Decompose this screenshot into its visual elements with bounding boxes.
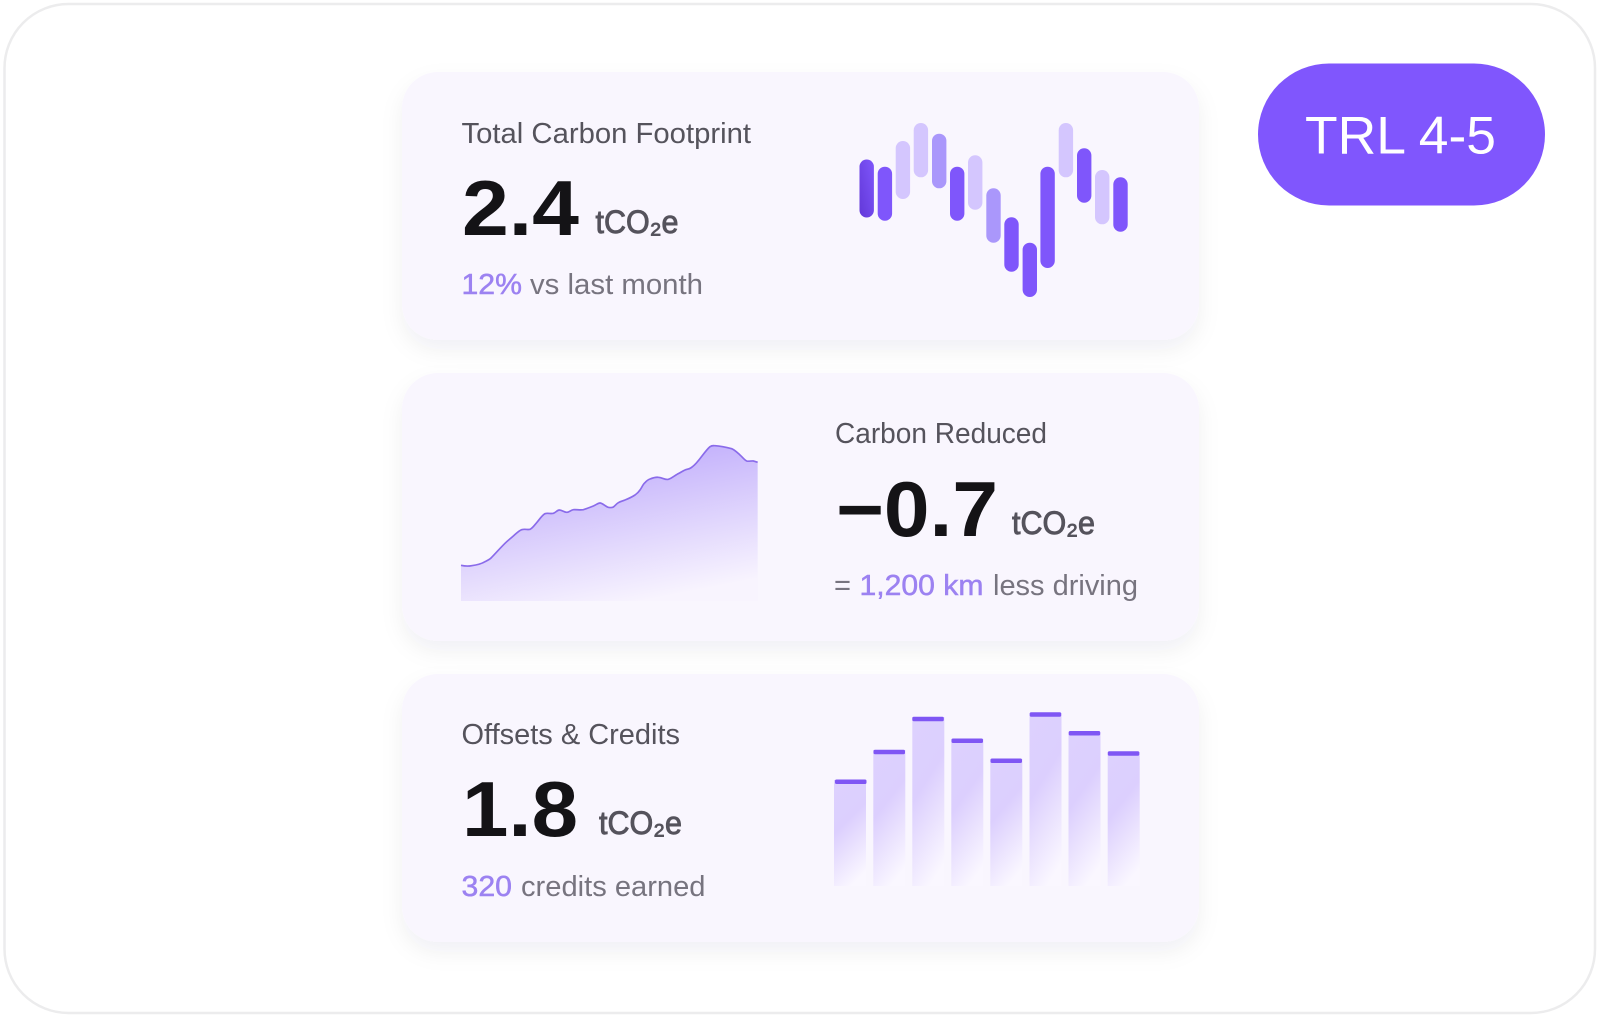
value: 1.8: 1.8 bbox=[462, 765, 578, 853]
chart: bar chart bbox=[834, 712, 1140, 886]
note: less driving bbox=[834, 570, 1138, 602]
note: vs last month: 12% bbox=[462, 269, 522, 301]
note: less driving: less driving bbox=[993, 570, 1138, 602]
card background bbox=[402, 72, 1199, 340]
value: 2.4: 2.4 bbox=[462, 164, 579, 252]
unit: tCO₂e bbox=[596, 204, 678, 240]
note: less driving: = bbox=[834, 570, 851, 602]
value: -0.7: −0.7 bbox=[836, 465, 998, 553]
unit: tCO₂e bbox=[1012, 505, 1095, 541]
panel: offsets and credits bbox=[402, 674, 1199, 942]
heading: offsets and credits: Offsets & Credits bbox=[462, 719, 680, 751]
chart: area chart bbox=[461, 446, 758, 601]
unit: tCO₂e bbox=[599, 805, 682, 841]
badge: TRL 4-5: TRL 4-5 bbox=[1305, 106, 1496, 166]
chart: candlestick bars bbox=[860, 123, 1128, 297]
card background bbox=[402, 674, 1199, 942]
note: vs last month: vs last month bbox=[530, 269, 703, 301]
badge: TRL 4-5 bbox=[1258, 64, 1545, 206]
panel: carbon reduced bbox=[402, 373, 1199, 641]
panel: total carbon footprint bbox=[402, 72, 1199, 340]
heading: total carbon footprint: Total Carbon Footprint bbox=[462, 118, 751, 150]
heading: carbon reduced: Carbon Reduced bbox=[835, 418, 1047, 450]
note: less driving: 1,200 km bbox=[860, 570, 984, 602]
note: credits earned: credits earned bbox=[521, 871, 706, 903]
card background bbox=[402, 373, 1199, 641]
note: credits earned: 320 bbox=[462, 871, 512, 903]
